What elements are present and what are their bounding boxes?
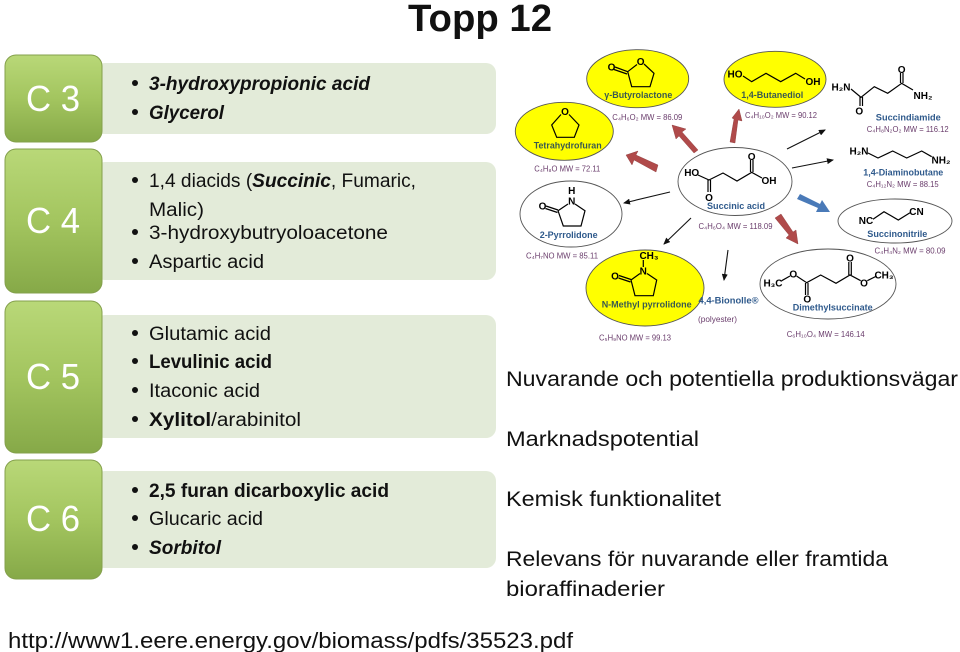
molecule: succinonitrile: NC: [859, 216, 873, 227]
molecule: N-methyl pyrrolidone: CH₃: [639, 251, 659, 262]
molecule: N-methyl pyrrolidone: N-Methyl pyrrolidone: [602, 300, 692, 310]
arrows: thin black reaction arrows: [624, 130, 833, 280]
panel: C5: C 5: [26, 356, 80, 397]
molecule: N-methyl pyrrolidone: O: [611, 272, 619, 282]
text block: criteria: [506, 368, 958, 601]
molecule: 1,4-diaminobutane: [850, 146, 950, 189]
molecule: 1,4-butanediol: HO: [728, 70, 743, 80]
panel: C4: 1,4 diacids (Succinic, Fumaric,: [149, 171, 416, 192]
molecule: dimethylsuccinate: CH₃: [874, 270, 894, 282]
molecule: succinonitrile: Succinonitrile: [867, 229, 927, 240]
molecule: 2-pyrrolidone: [520, 181, 622, 260]
label: 4,4-Bionolle: [698, 296, 758, 324]
molecule: succinic acid: [678, 148, 792, 231]
molecule: gamma-butyrolactone: O: [608, 62, 616, 74]
molecule: succindiamide: [832, 65, 949, 134]
panel: C3: [5, 55, 496, 142]
molecule: succinic acid: Succinic acid: [707, 201, 765, 212]
label: 4,4-Bionolle: (polyester): [698, 315, 737, 324]
molecule: 1,4-butanediol: C₄H₁₀O₂ MW = 90.12: [745, 111, 817, 120]
molecule: succindiamide: NH₂: [914, 91, 932, 102]
molecule: tetrahydrofuran: Tetrahydrofuran: [534, 140, 602, 152]
panel: C6: Sorbitol: [149, 538, 222, 559]
panel: C3: Glycerol: [149, 103, 225, 124]
text block: criteria: Nuvarande och potentiella produktionsvägar: [506, 368, 958, 391]
molecule: dimethylsuccinate: O: [789, 270, 797, 280]
molecule: succinonitrile: CN: [909, 207, 924, 218]
molecule: succinic acid: O: [748, 152, 756, 163]
panel: C4: Aspartic acid: [149, 252, 264, 273]
molecule: succinic acid: HO: [684, 168, 699, 179]
molecule: dimethylsuccinate: Dimethylsuccinate: [793, 302, 873, 314]
molecule: tetrahydrofuran: O: [561, 107, 569, 118]
panel: C6: C 6: [26, 498, 80, 539]
molecule: succinic acid: C₄H₆O₄ MW = 118.09: [698, 222, 773, 231]
text block: criteria: Relevans för nuvarande eller framtida: [506, 548, 888, 571]
molecule: gamma-butyrolactone: [587, 50, 689, 122]
molecule: 1,4-diaminobutane: H₂N: [850, 146, 868, 158]
molecule: succindiamide: O: [898, 65, 906, 76]
panel: C3: 3-hydroxypropionic acid: [149, 74, 370, 95]
molecule: succindiamide: C₄H₈N₂O₂ MW = 116.12: [867, 125, 949, 134]
text block: criteria: bioraffinaderier: [506, 578, 665, 601]
text block: criteria: Kemisk funktionalitet: [506, 488, 721, 511]
molecule: succindiamide: Succindiamide: [876, 112, 941, 124]
panel: C6: [5, 460, 496, 579]
panel: C5: [5, 301, 496, 453]
panel: C6: Glucaric acid: [149, 509, 263, 530]
molecule: succinic acid: O: [705, 193, 713, 204]
molecule: gamma-butyrolactone: γ-Butyrolactone: [604, 90, 672, 101]
panel: C5: Glutamic acid: [149, 324, 271, 345]
molecule: succinic acid: OH: [762, 176, 776, 187]
panel: C5: Itaconic acid: [149, 381, 260, 402]
molecule: 1,4-diaminobutane: 1,4-Diaminobutane: [863, 168, 943, 178]
molecule: 2-pyrrolidone: 2-Pyrrolidone: [540, 230, 598, 241]
panel: C3: C 3: [26, 78, 80, 119]
molecule: dimethylsuccinate: C₆H₁₀O₄ MW = 146.14: [787, 330, 865, 339]
molecule: 1,4-diaminobutane: C₄H₁₂N₂ MW = 88.15: [867, 180, 939, 189]
molecule: 1,4-diaminobutane: NH₂: [932, 156, 950, 166]
molecule: dimethylsuccinate: [760, 249, 896, 339]
molecule: gamma-butyrolactone: C₄H₆O₂ MW = 86.09: [612, 113, 683, 122]
molecule: 2-pyrrolidone: H: [568, 186, 575, 197]
molecule: N-methyl pyrrolidone: N: [640, 266, 647, 278]
molecule: tetrahydrofuran: C₄H₈O MW = 72.11: [534, 164, 601, 174]
chemistry diagram: [515, 50, 952, 342]
text block: criteria: Marknadspotential: [506, 428, 699, 451]
arrows: red and blue block arrows: [626, 109, 830, 244]
molecule: succinonitrile: C₄H₄N₂ MW = 80.09: [874, 246, 946, 256]
panel: C4: C 4: [26, 200, 80, 241]
molecule: N-methyl pyrrolidone: [586, 250, 704, 342]
molecule: succindiamide: H₂N: [832, 82, 850, 94]
label: 4,4-Bionolle: 4,4-Bionolle®: [698, 296, 758, 306]
panel: C4: [5, 149, 496, 293]
molecule: gamma-butyrolactone: O: [637, 57, 645, 68]
molecule: succinonitrile: [838, 199, 952, 256]
molecule: tetrahydrofuran: [515, 102, 613, 174]
panel: C4: Malic): [149, 200, 204, 221]
panel: C5: Levulinic acid: [149, 352, 272, 373]
molecule: N-methyl pyrrolidone: C₅H₉NO MW = 99.13: [599, 334, 671, 342]
molecule: 2-pyrrolidone: C₄H₇NO MW = 85.11: [526, 252, 598, 260]
molecule: 2-pyrrolidone: O: [539, 202, 547, 212]
molecule: 1,4-butanediol: [724, 51, 826, 120]
panel: C5: Xylitol /arabinitol: [149, 410, 301, 431]
molecule: 1,4-butanediol: 1,4-Butanediol: [741, 90, 803, 101]
molecule: dimethylsuccinate: H₃C: [763, 278, 783, 290]
panel: C4: 3-hydroxybutryoloacetone: [149, 223, 388, 244]
molecule: dimethylsuccinate: O: [846, 254, 854, 264]
molecule: dimethylsuccinate: O: [860, 278, 868, 290]
molecule: 2-pyrrolidone: N: [568, 196, 575, 208]
molecule: dimethylsuccinate: O: [803, 294, 811, 306]
molecule: succindiamide: O: [855, 106, 863, 118]
panel: C6: 2,5 furan dicarboxylic acid: [149, 481, 389, 502]
molecule: 1,4-butanediol: OH: [806, 77, 820, 88]
